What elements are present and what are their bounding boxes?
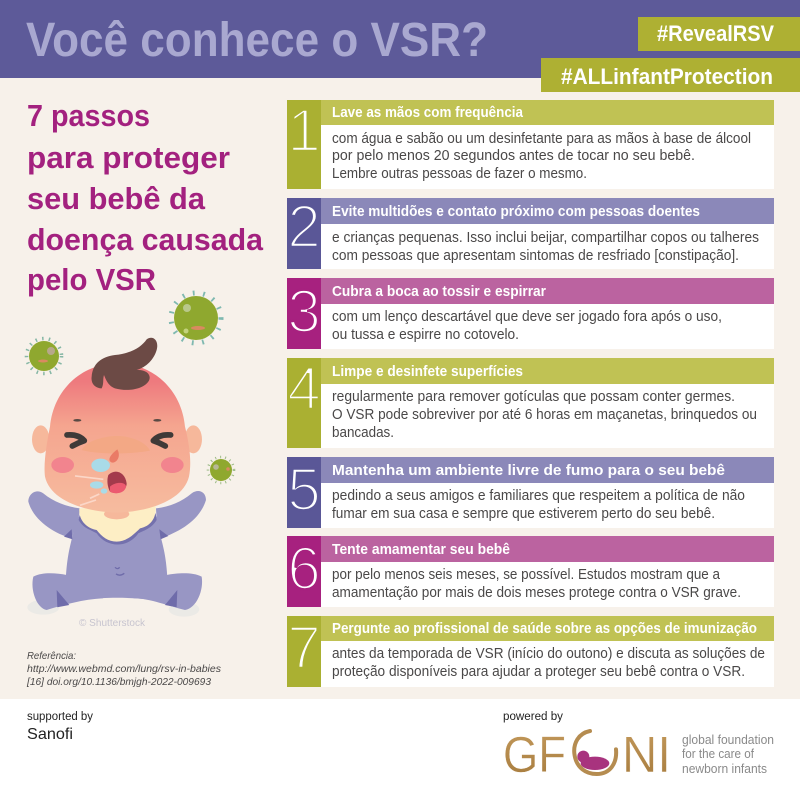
logo: GFCNI bbox=[503, 726, 671, 783]
panel: step 6 bbox=[287, 535, 774, 607]
hashtag: RevealRSV: #RevealRSV bbox=[657, 21, 774, 46]
heading: 7 passos: seu bebê da bbox=[27, 181, 206, 216]
heading: 7 passos: 7 passos bbox=[27, 98, 150, 133]
step 3 heading: Cubra a boca ao tossir e espirrar bbox=[332, 284, 546, 300]
footer bbox=[0, 699, 800, 800]
step 1 text: Lembre outras pessoas de fazer o mesmo. bbox=[332, 166, 587, 182]
panel: step 4 bbox=[287, 355, 774, 448]
heading: 7 passos: para proteger bbox=[27, 140, 230, 175]
logo tagline bbox=[682, 732, 774, 776]
hashtag: RevealRSV bbox=[638, 17, 800, 51]
sponsor: Sanofi: Sanofi bbox=[27, 726, 73, 743]
step 2 text: e crianças pequenas. Isso inclui beijar, compartilhar copos ou talheres bbox=[332, 230, 759, 246]
step 7 text: proteção disponíveis para ajudar a proteger seu bebê contra o VSR. bbox=[332, 664, 745, 680]
step 1 text bbox=[332, 131, 751, 182]
image credit: © Shutterstock bbox=[79, 618, 146, 629]
step 4 text: regularmente para remover gotículas que possam conter germes. bbox=[332, 389, 735, 405]
step 2 text bbox=[332, 230, 759, 264]
powered by: powered by bbox=[503, 711, 563, 723]
step 5 text: fumar em sua casa e sempre que estiverem perto do seu bebê. bbox=[332, 506, 715, 522]
step 6 text: amamentação por mais de dois meses protege contra o VSR grave. bbox=[332, 585, 741, 601]
step 5 text: pedindo a seus amigos e familiares que respeitem a política de não bbox=[332, 488, 745, 504]
heading: 7 passos: doença causada bbox=[27, 222, 264, 257]
step 7 text bbox=[332, 646, 765, 680]
step 7 heading: Pergunte ao profissional de saúde sobre as opções de imunização bbox=[332, 621, 757, 637]
logo: GFCNI: GF bbox=[503, 726, 566, 783]
supported by: supported by bbox=[27, 711, 93, 723]
header banner bbox=[0, 0, 800, 78]
hashtag: ALLinfantProtection: #ALLinfantProtection bbox=[561, 64, 773, 89]
step 5 heading: Mantenha um ambiente livre de fumo para o seu bebê bbox=[332, 463, 725, 479]
icon: virus top left bbox=[26, 338, 62, 374]
title: Você conhece o VSR? bbox=[26, 14, 488, 67]
number 1: 1 bbox=[287, 97, 321, 164]
panel: step 7 bbox=[287, 614, 774, 687]
illustration: sneezing baby bbox=[27, 338, 206, 617]
panel: step 5 bbox=[287, 456, 774, 528]
step 4 heading: Limpe e desinfete superfícies bbox=[332, 364, 523, 380]
panel: step 3 bbox=[287, 278, 774, 349]
heading: 7 passos: pelo VSR bbox=[27, 262, 156, 297]
step 4 text: bancadas. bbox=[332, 425, 394, 441]
step 7 text: antes da temporada de VSR (início do outono) e discuta as soluções de bbox=[332, 646, 765, 662]
step 3 text: com um lenço descartável que deve ser jogado fora após o uso, bbox=[332, 309, 722, 325]
number 6: 6 bbox=[287, 535, 321, 602]
logo tagline: global foundation bbox=[682, 732, 774, 747]
logo: GFCNI: NI bbox=[622, 726, 671, 783]
step 2 heading: Evite multidões e contato próximo com pessoas doentes bbox=[332, 204, 700, 220]
icon: virus top right bbox=[171, 293, 221, 343]
step 3 text bbox=[332, 309, 722, 343]
step 1 heading: Lave as mãos com frequência bbox=[332, 105, 524, 121]
number 3: 3 bbox=[287, 278, 321, 345]
logo tagline: for the care of bbox=[682, 746, 754, 761]
step 6 text: por pelo menos seis meses, se possível. Estudos mostram que a bbox=[332, 567, 721, 583]
panel: step 2 bbox=[287, 193, 774, 269]
number 7: 7 bbox=[287, 614, 321, 681]
panel: step 1 bbox=[287, 97, 774, 189]
references: [16] doi.org/10.1136/bmjgh-2022-009693 bbox=[26, 676, 211, 688]
step 4 text: O VSR pode sobreviver por até 6 horas em maçanetas, brinquedos ou bbox=[332, 407, 757, 423]
references bbox=[26, 650, 222, 688]
references: Referência: bbox=[27, 650, 76, 662]
icon: virus right bbox=[208, 457, 234, 483]
number 4: 4 bbox=[287, 355, 321, 422]
hashtag: ALLinfantProtection bbox=[541, 58, 800, 92]
references: http://www.webmd.com/lung/rsv-in-babies bbox=[27, 663, 222, 675]
step 3 text: ou tussa e espirre no cotovelo. bbox=[332, 327, 519, 343]
step 1 text: com água e sabão ou um desinfetante para as mãos à base de álcool bbox=[332, 131, 751, 147]
step 6 text bbox=[332, 567, 741, 601]
logo tagline: newborn infants bbox=[682, 761, 767, 776]
step 2 text: com pessoas que apresentam sintomas de resfriado [constipação]. bbox=[332, 248, 739, 264]
step 1 text: por pelo menos 20 segundos antes de tocar no seu bebê. bbox=[332, 148, 695, 164]
step 4 text bbox=[332, 389, 757, 441]
number 2: 2 bbox=[287, 193, 321, 260]
heading: 7 passos bbox=[27, 98, 264, 297]
step 6 heading: Tente amamentar seu bebê bbox=[332, 542, 510, 558]
number 5: 5 bbox=[287, 456, 321, 523]
step 5 text bbox=[332, 488, 745, 522]
